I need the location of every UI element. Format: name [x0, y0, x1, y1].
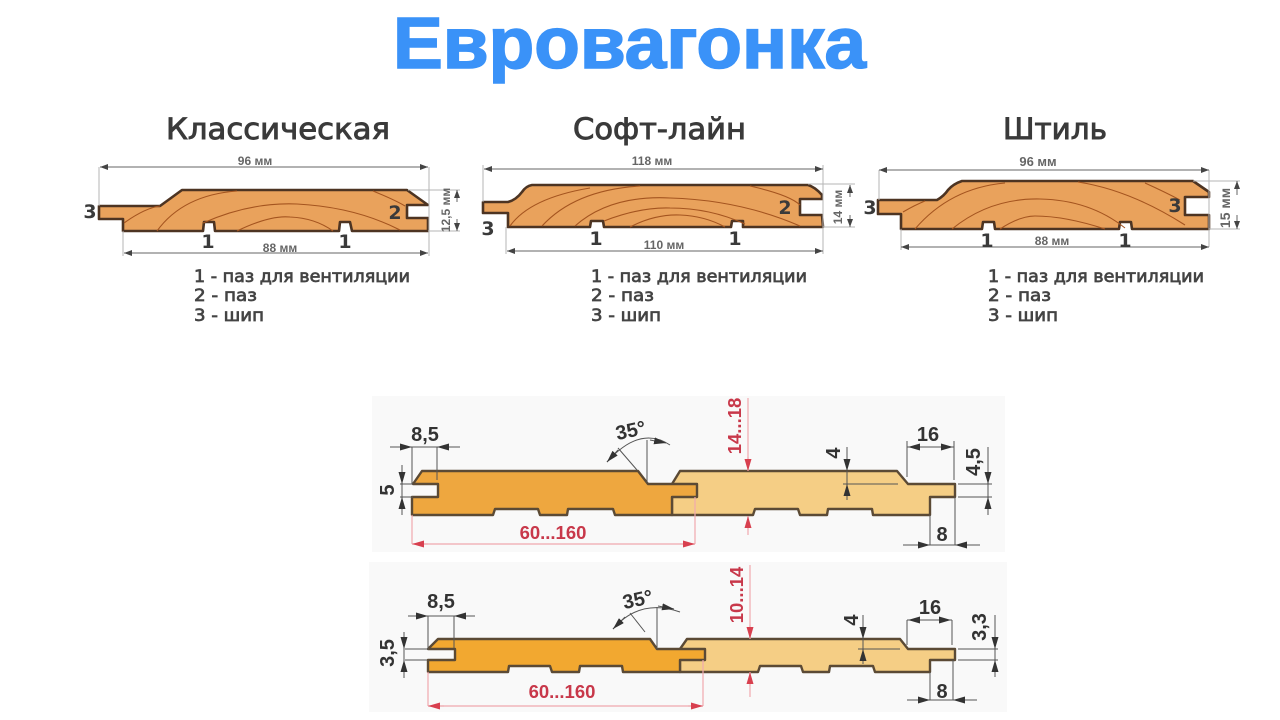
panel: joint drawing 10...14 mm [369, 562, 1007, 712]
label: 35 degrees: 35° [621, 586, 655, 614]
dimensions: soft-line: 14 мм [831, 190, 845, 224]
callout numbers: classic [83, 201, 402, 253]
dimensions: shtil [879, 154, 1240, 250]
dimensions: soft-line: 118 мм [632, 154, 672, 168]
panel: soft-line profile [481, 112, 855, 325]
panel background [372, 396, 1005, 552]
callout numbers: shtil [863, 195, 1182, 252]
label: 35 degrees: 35° [614, 417, 648, 445]
dimensions: classic: 96 мм [238, 154, 272, 168]
callout numbers: classic: 2 [388, 202, 402, 224]
label: 8: 8 [936, 524, 948, 546]
label: 8: 8 [936, 681, 948, 703]
board: orange left [412, 471, 697, 515]
panel: joint drawing 14...18 mm [372, 396, 1005, 552]
dimensions: shtil: 96 мм [1019, 154, 1057, 169]
legend: shtil: 2 - паз [988, 286, 1051, 305]
label: 4: 4 [841, 614, 863, 626]
callout numbers: soft-line: 3 [481, 218, 495, 240]
label: 60...160: 60...160 [520, 522, 586, 543]
callout numbers: classic: 1 [201, 231, 215, 253]
board: orange left [428, 639, 705, 672]
callout numbers: soft-line: 1 [728, 228, 742, 250]
label: 3,5: 3,5 [377, 639, 399, 667]
callout numbers: shtil: 3 [863, 197, 877, 219]
heading: shtil: Штиль [1003, 112, 1107, 146]
dimensions: soft-line [483, 154, 855, 254]
label: 8,5: 8,5 [411, 424, 439, 446]
label: 16: 16 [919, 597, 941, 619]
dimension lines: red [412, 398, 748, 544]
board cross-section: shtil [878, 181, 1209, 229]
label: 14...18: 14...18 [724, 398, 745, 454]
dimension lines: black [377, 586, 998, 703]
heading: classic: Классическая [166, 112, 390, 146]
callout numbers: soft-line [481, 197, 792, 250]
callout numbers: shtil: 3 [1168, 195, 1182, 217]
board: light right [672, 471, 955, 515]
dimension lines: red [428, 565, 750, 706]
legend: soft-line [591, 267, 807, 325]
legend: classic: 2 - паз [194, 286, 257, 305]
legend: shtil: 3 - шип [988, 306, 1058, 325]
label: 4: 4 [823, 447, 845, 459]
board cross-section: classic [99, 190, 428, 231]
legend: soft-line: 3 - шип [591, 306, 661, 325]
callout numbers: soft-line: 1 [589, 228, 603, 250]
callout numbers: shtil: 1 [1118, 230, 1132, 252]
legend: soft-line: 2 - паз [591, 286, 654, 305]
label: 3,3: 3,3 [969, 613, 991, 641]
board: light right [680, 639, 955, 672]
legend: classic [194, 267, 410, 325]
legend: classic: 1 - паз для вентиляции [194, 267, 410, 286]
dimensions: classic: 12,5 мм [439, 188, 453, 232]
dimensions: classic [99, 154, 460, 256]
dimensions: shtil: 15 мм [1217, 188, 1233, 228]
legend: classic: 3 - шип [194, 306, 264, 325]
callout numbers: classic: 1 [338, 231, 352, 253]
label: 8,5: 8,5 [427, 591, 455, 613]
callout numbers: shtil: 1 [980, 230, 994, 252]
dimensions: classic: 88 мм [263, 241, 297, 255]
dimensions: shtil: 88 мм [1035, 234, 1069, 248]
panel background [369, 562, 1007, 712]
label: 5: 5 [377, 484, 399, 496]
callout numbers: classic: 3 [83, 201, 97, 223]
title: Евровагонка [393, 4, 867, 84]
board cross-section: soft-line [483, 185, 823, 227]
callout numbers: soft-line: 2 [778, 197, 792, 219]
label: 60...160: 60...160 [529, 681, 595, 702]
label: 16: 16 [917, 424, 939, 446]
dimensions: soft-line: 110 мм [644, 238, 684, 252]
panel: shtil profile [863, 112, 1240, 325]
label: 4,5: 4,5 [963, 448, 985, 476]
panel: classic profile [83, 112, 460, 325]
label: 10...14: 10...14 [726, 566, 747, 623]
legend: shtil [988, 267, 1204, 325]
legend: soft-line: 1 - паз для вентиляции [591, 267, 807, 286]
legend: shtil: 1 - паз для вентиляции [988, 267, 1204, 286]
heading: soft-line: Софт-лайн [573, 112, 746, 146]
dimension lines: black [377, 417, 992, 546]
